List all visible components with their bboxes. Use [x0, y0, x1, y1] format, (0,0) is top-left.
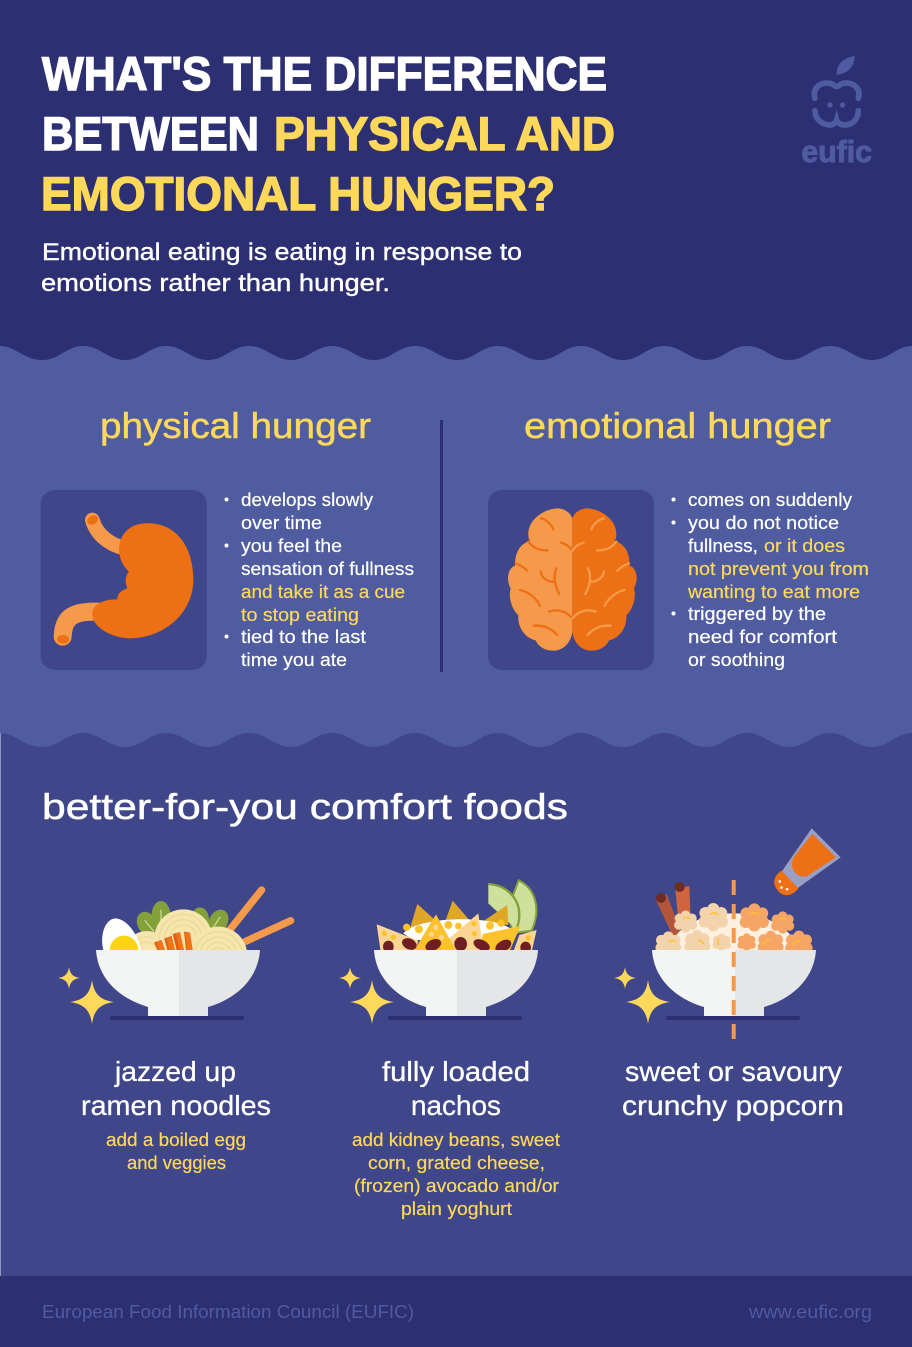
label: ramen: and veggies [127, 1152, 226, 1173]
label: nachos: add kidney beans, sweet [352, 1129, 560, 1150]
text: physical hunger bullets: time you ate [241, 649, 347, 670]
footer: European Food Information Council (EUFIC) [42, 1301, 414, 1322]
text: emotional hunger bullets: or it does [764, 535, 845, 556]
panel: comfort foods background [0, 733, 912, 1280]
text: physical hunger bullets: tied to the last [241, 626, 366, 647]
text: emotional hunger bullets [672, 489, 869, 670]
text: physical hunger bullets: to stop eating [241, 604, 359, 625]
panel: physical hunger [41, 405, 414, 670]
title: PHYSICAL AND [274, 107, 615, 160]
text: emotional hunger bullets: not prevent you from [688, 558, 869, 579]
illustration: nachos bowl [339, 880, 538, 1024]
panel: header background [0, 0, 912, 360]
label: nachos [352, 1056, 560, 1219]
title: EMOTIONAL HUNGER? [41, 167, 555, 220]
text: emotional hunger bullets: fullness, [688, 535, 758, 556]
title: BETWEEN [42, 107, 259, 160]
text: physical hunger bullets: and take it as a cue [241, 581, 405, 602]
subtitle: Emotional eating is eating in response to [42, 239, 522, 266]
text: emotional hunger bullets: you do not notice [688, 512, 839, 533]
text: physical hunger bullets: sensation of fullness [241, 558, 414, 579]
icon: brain [488, 490, 654, 670]
title [41, 47, 615, 220]
label: ramen: ramen noodles [81, 1090, 271, 1121]
label: popcorn: crunchy popcorn [622, 1090, 844, 1121]
label: ramen: add a boiled egg [106, 1129, 246, 1150]
label: nachos: plain yoghurt [401, 1198, 512, 1219]
subtitle [41, 239, 522, 297]
label: popcorn [622, 1056, 844, 1121]
heading: emotional hunger: emotional hunger [524, 405, 831, 446]
label: ramen [81, 1056, 271, 1173]
label: popcorn: sweet or savoury [625, 1056, 842, 1087]
text: emotional hunger bullets: or soothing [688, 649, 785, 670]
label: ramen: jazzed up [114, 1056, 236, 1087]
icon: eufic logo [801, 56, 872, 169]
text: emotional hunger bullets: need for comfort [688, 626, 837, 647]
title: WHAT'S THE DIFFERENCE [42, 47, 607, 100]
text: emotional hunger bullets: wanting to eat more [687, 581, 860, 602]
text: emotional hunger bullets: comes on suddenly [688, 489, 853, 510]
divider [440, 420, 443, 672]
text: physical hunger bullets [224, 489, 414, 670]
illustration: popcorn bowl [614, 828, 841, 1039]
panel: hunger comparison background [0, 346, 912, 750]
text: physical hunger bullets: develops slowly [241, 489, 374, 510]
illustration: ramen bowl [58, 890, 291, 1024]
footer [0, 1276, 912, 1347]
icon: stomach [41, 490, 207, 670]
heading: better-for-you comfort foods: better-for-you comfort foods [42, 786, 568, 827]
label: nachos: (frozen) avocado and/or [354, 1175, 559, 1196]
panel: emotional hunger [488, 405, 869, 670]
subtitle: emotions rather than hunger. [41, 270, 390, 297]
label: nachos: corn, grated cheese, [368, 1152, 545, 1173]
label: nachos: fully loaded [382, 1056, 530, 1087]
text: physical hunger bullets: over time [241, 512, 322, 533]
text: emotional hunger bullets: triggered by the [688, 603, 826, 624]
icon: eufic logo: eufic [801, 134, 872, 169]
footer: www.eufic.org [748, 1301, 872, 1322]
label: nachos: nachos [411, 1090, 501, 1121]
heading: physical hunger: physical hunger [100, 405, 371, 446]
text: physical hunger bullets: you feel the [241, 535, 342, 556]
